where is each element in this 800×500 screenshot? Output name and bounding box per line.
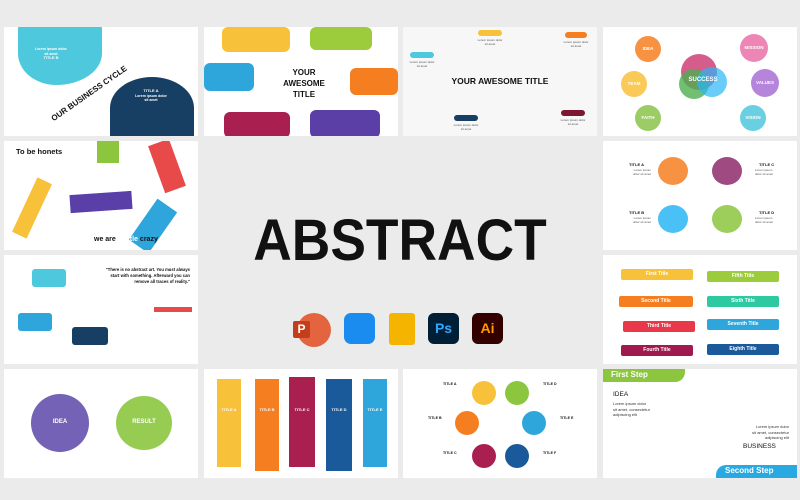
slide: title icons: TITLE D bbox=[759, 210, 774, 215]
slide: title icons: dolor sit amet bbox=[633, 220, 651, 224]
slide: eight titles: Fourth Title bbox=[643, 347, 671, 353]
slide: awesome title pills: Lorem ipsum dolor bbox=[564, 40, 588, 44]
slide: business cycle: TITLE A bbox=[144, 88, 158, 93]
slide: title icons: Lorem ipsum bbox=[755, 216, 772, 220]
app icons bbox=[293, 313, 503, 347]
slide: vertical brushes bbox=[204, 369, 398, 478]
slide: eight titles: Third Title bbox=[647, 323, 671, 329]
icon: illustrator: Ai bbox=[480, 320, 494, 336]
slide: eight titles: First Title bbox=[646, 271, 668, 277]
slide: success circles: MISSION bbox=[744, 45, 764, 50]
main title: ABSTRACT bbox=[253, 208, 547, 273]
slide: steps: adipiscing elit bbox=[613, 412, 637, 417]
slide: success circles: TEAM bbox=[628, 81, 640, 86]
slide: title icons: Lorem ipsum bbox=[634, 216, 651, 220]
slide: awesome title pills: Lorem ipsum dolor bbox=[410, 60, 434, 64]
slide: six circles: TITLE A bbox=[443, 382, 456, 386]
slide: awesome title pills: sit amet bbox=[485, 42, 495, 46]
slide: business cycle: Lorem ipsum dolor bbox=[135, 94, 167, 98]
slide: to be honest bbox=[4, 141, 198, 250]
slide: idea result: IDEA bbox=[53, 419, 67, 425]
slide: success circles: VISION bbox=[745, 115, 761, 120]
rotated title: OUR BUSINESS CYCLE bbox=[50, 64, 129, 123]
slide: steps: First Step bbox=[611, 370, 648, 379]
slide: steps bbox=[603, 369, 797, 478]
slide: eight titles: Fifth Title bbox=[732, 273, 754, 279]
title: YOUR AWESOME TITLE bbox=[452, 76, 548, 86]
slide: business cycle bbox=[4, 27, 198, 136]
slide: idea result bbox=[4, 369, 198, 478]
slide: steps: IDEA bbox=[613, 391, 628, 398]
slide: business cycle: Lorem ipsum dolor bbox=[35, 47, 67, 51]
slide: success circles: SUCCESS bbox=[688, 77, 718, 83]
slide: steps: Lorem ipsum dolor bbox=[756, 424, 789, 429]
slide: business cycle: sit amet bbox=[44, 52, 58, 56]
slide: steps: Second Step bbox=[725, 466, 773, 475]
slide: vertical brushes: TITLE B bbox=[259, 407, 275, 412]
slide: six circles: TITLE F bbox=[543, 451, 556, 455]
icon: illustrator bbox=[472, 313, 503, 344]
slide: eight titles bbox=[603, 255, 797, 364]
slide: title icons: dolor sit amet bbox=[633, 172, 651, 176]
icon: keynote bbox=[344, 313, 375, 344]
slide: steps: sit amet, consectetur bbox=[752, 430, 789, 434]
slide: awesome title pills: sit amet bbox=[417, 64, 427, 68]
slide: six circles: TITLE D bbox=[543, 382, 557, 386]
slide: brush labels bbox=[204, 27, 398, 136]
slide: vertical brushes: TITLE E bbox=[368, 407, 382, 412]
slide: title icons: TITLE B bbox=[629, 210, 644, 215]
navy blob bbox=[110, 77, 194, 139]
slide: eight titles: Seventh Title bbox=[727, 321, 759, 327]
slide: business cycle: sit amet bbox=[144, 98, 158, 102]
slide: awesome title pills: sit amet bbox=[461, 127, 471, 131]
slide: awesome title pills bbox=[403, 27, 597, 136]
slide: steps: sit amet, consectetur bbox=[613, 406, 650, 412]
slide: steps: Lorem ipsum dolor bbox=[613, 401, 646, 406]
slide: awesome title pills: sit amet bbox=[571, 44, 581, 48]
slide: to be honest: To be honets bbox=[16, 147, 62, 156]
icon: photoshop bbox=[428, 313, 459, 344]
slide: idea result: RESULT bbox=[132, 419, 156, 425]
slide: awesome title pills: sit amet bbox=[568, 122, 578, 126]
title: TITLE bbox=[293, 90, 315, 99]
slide: success circles bbox=[603, 27, 797, 136]
slide: success circles: IDEA bbox=[643, 46, 653, 51]
icon: photoshop: Ps bbox=[435, 320, 452, 336]
slide: to be honest: we are a little crazy bbox=[94, 236, 158, 243]
slide: vertical brushes: TITLE D bbox=[331, 407, 347, 412]
icon: slides bbox=[389, 313, 415, 345]
slide: title icons: Lorem ipsum bbox=[634, 168, 651, 172]
slide: vertical brushes: TITLE A bbox=[222, 407, 236, 412]
slide: six circles: TITLE E bbox=[560, 416, 573, 420]
icon: powerpoint: P bbox=[297, 322, 306, 336]
title: YOUR bbox=[292, 68, 316, 77]
slide: title icons bbox=[603, 141, 797, 250]
slide: eight titles: Eighth Title bbox=[729, 346, 757, 352]
slide: quote bbox=[4, 255, 198, 364]
quote text: "There is no abstract art. You must always start with something. Afterward you can remove all traces of reality." bbox=[106, 267, 190, 284]
icon: powerpoint bbox=[297, 313, 331, 347]
slide: awesome title pills: Lorem ipsum dolor bbox=[561, 118, 585, 122]
slide: success circles: VALUES bbox=[756, 80, 774, 85]
slide: business cycle: TITLE B bbox=[43, 55, 59, 60]
slide: success circles: FAITH bbox=[642, 115, 654, 120]
slide: title icons: TITLE A bbox=[629, 162, 644, 167]
title bbox=[283, 68, 325, 99]
slide: title icons: Lorem ipsum bbox=[755, 168, 772, 172]
slide: awesome title pills: Lorem ipsum dolor bbox=[478, 38, 502, 42]
title: AWESOME bbox=[283, 79, 325, 88]
slide: six circles bbox=[403, 369, 597, 478]
slide: six circles: TITLE B bbox=[428, 416, 442, 420]
teal blob bbox=[18, 27, 102, 85]
slide: title icons: dolor sit amet bbox=[755, 172, 773, 176]
slide: vertical brushes: TITLE C bbox=[294, 407, 310, 412]
slide: eight titles: Sixth Title bbox=[731, 298, 755, 304]
slide: steps: adipiscing elit bbox=[765, 435, 789, 440]
slide: six circles: TITLE C bbox=[443, 451, 457, 455]
slide: awesome title pills: Lorem ipsum dolor bbox=[454, 123, 478, 127]
slide: title icons: TITLE C bbox=[759, 162, 774, 167]
slide: title icons: dolor sit amet bbox=[755, 220, 773, 224]
slide: eight titles: Second Title bbox=[641, 298, 671, 304]
slide: steps: BUSINESS bbox=[743, 443, 776, 450]
